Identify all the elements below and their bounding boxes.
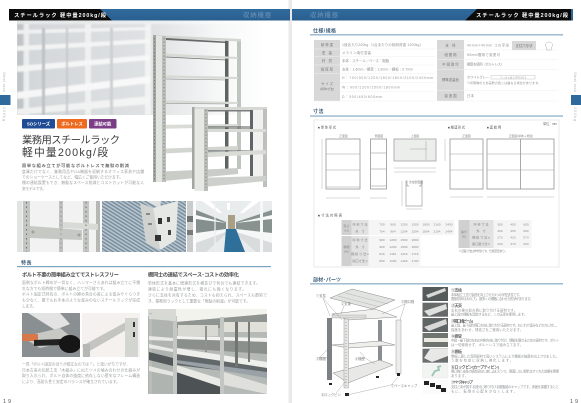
part 5: う数を有効に収納し美化します。 [451, 358, 513, 362]
depth table: 開口面寸法 b [472, 241, 490, 246]
part 7: ⑦ベースキャップ [451, 378, 473, 384]
drawing labels: 正面図 [462, 134, 471, 138]
intro text: 簡単な組み立てが可能なボルトレスで無駄の削減 [22, 162, 130, 169]
width table: 1500 [401, 245, 408, 249]
exploded parts diagram: ①支柱 [316, 293, 327, 298]
part 1: 関係形状のほかにも、数多くの規格に合わせた形状があります。 [451, 296, 533, 301]
width table: 呼 称 寸 法 [353, 237, 367, 242]
dimensions panel: ■増連形式 [448, 124, 466, 130]
height table: 2400 [446, 222, 453, 226]
part 6: 開口桟と支柱の組合部分に差し込むピンで、脱落しない設計はすぐれた効果を発揮 [451, 369, 560, 374]
depth table: 棚 板 寸 法 a [472, 234, 490, 240]
feature: boltless text: 面倒なボルト締めが一切なく、ハンマーさえあれば組み立てに不慣 [22, 280, 140, 285]
part 4 [422, 332, 559, 347]
spec table left: H：700/900/1200/1500/1800/2100/2400mm [342, 76, 433, 80]
height table: 1804 [423, 230, 430, 234]
photo: post on carpet [102, 201, 186, 252]
right page header bar [292, 9, 573, 20]
width table: 外 寸 [355, 244, 365, 249]
series badges [22, 119, 116, 128]
feature: linking text: 単体形式を基本に増連形式を横並びで何台でも連結できます。 [148, 280, 260, 286]
parts heading: 部材･パーツ [313, 276, 341, 284]
drawing: top view [394, 139, 445, 172]
spec table right: 50mm間隔で変更可 [467, 52, 501, 57]
height table: 外 寸 [355, 228, 365, 234]
feature: linking text [148, 270, 267, 304]
intro text: 気モデルです。 [22, 186, 46, 191]
left side tab: 200kg [2, 107, 7, 121]
part 1 [422, 286, 533, 301]
spec table right: 日本 [467, 93, 475, 98]
width table: 1800 [412, 245, 419, 249]
height table: 1504 [412, 230, 419, 234]
feature: linking text: 連結により耐震性が増し、揺れにも強くなります。 [148, 286, 246, 292]
spec table left: 本体：スチール／ベース：樹脂 [342, 58, 390, 63]
spec table left: W：900/1200/1500/1800mm [342, 86, 400, 90]
spec table right: 標準塗装色 [442, 77, 460, 82]
spec table left: メラミン焼付塗装 [342, 50, 372, 55]
left side tab [0, 72, 10, 121]
photo: rack beam closeup [17, 201, 100, 252]
height table: 1200 [401, 222, 408, 226]
boltless note text: により、高耐久性と安定のバランスが確立されています。 [22, 379, 120, 384]
exploded parts diagram: ④棚受 [355, 356, 366, 361]
depth table: ※記載寸法は参考値です。仕様変更あり。 [458, 249, 508, 253]
part 7: 支柱と床が接する部分に取り付ける樹脂製のキャップです。床面を保護するとと [451, 384, 559, 389]
drawing: front view [322, 139, 360, 198]
depth table: 220 [497, 242, 503, 246]
part 4: 中段・最下段の左右の内側方向に取り付け、棚板を載せるための部材です。ボルト [451, 338, 559, 343]
spec table right [437, 40, 558, 101]
depth table: 呼 称 寸 法 [474, 222, 488, 226]
spec table right: 支 柱 [445, 42, 456, 48]
spec table right: 支柱穴形状 [516, 43, 533, 48]
height table: 704 [379, 230, 385, 234]
height table: 呼 称 寸 法 [353, 222, 367, 226]
depth table: 423 [510, 236, 516, 240]
dimensions panel: ■単体形式 [318, 124, 337, 130]
dimensions panel [314, 120, 559, 267]
width table: 800 [379, 259, 385, 263]
exploded parts diagram: ③開口桟 [401, 299, 415, 304]
height table: (H) [344, 228, 349, 232]
part 3 [422, 317, 559, 332]
exploded parts diagram: ⑥ロックピン [321, 392, 341, 397]
spec table right: 段 間 隔 [444, 52, 457, 57]
table caption: ■寸法対照表 [318, 212, 343, 218]
part 4: は一切使用せず、ボルトレスで組み立てます。 [451, 342, 523, 347]
spec table right: 中 段 取 付 [442, 62, 459, 66]
height table: 1800 [423, 222, 430, 226]
main heading: 軽中量200kg/段 [22, 145, 108, 159]
part 7: もに、転倒の心配を少なくします。 [451, 388, 517, 393]
width table: 900 [379, 238, 385, 242]
width table: 1116 [390, 252, 396, 256]
dimensions heading: 寸法 [313, 108, 324, 115]
spec table left: 材 質 [322, 58, 333, 63]
intro text: 倉庫だけでなく、業務用品やOA機器を収納するオフィス家具や店舗 [22, 169, 144, 174]
drawing: post section [402, 181, 422, 209]
boltless note text [22, 362, 140, 384]
hero warehouse photo [17, 21, 222, 115]
spec table left: サ イ ズ [321, 81, 334, 86]
left side tab: Steel rack [2, 72, 7, 92]
width table [342, 236, 420, 266]
drawing labels: 上面図 [411, 134, 419, 138]
spec table left: 板 厚 厚 [321, 66, 334, 72]
drawing labels: 正面図 [339, 134, 348, 138]
part 2: 左右の棒の前方奥に取り付ける部材です。 [451, 307, 517, 312]
height table: 1500 [412, 222, 419, 226]
intro text [22, 162, 144, 191]
width table: 1700 [412, 259, 419, 263]
spec table left [314, 40, 435, 101]
spec table left: D：300/450/600mm [342, 95, 382, 99]
spec table right: ホワイトグレー [467, 74, 490, 80]
height table: 2100 [434, 222, 441, 226]
width table: 1800 [412, 238, 419, 242]
spec table left: 塗 装 [322, 50, 333, 55]
right side tab [571, 72, 581, 121]
drawing labels: 支柱断面図 [409, 180, 423, 184]
depth table: 573 [523, 236, 529, 240]
part 3: 強度をあわせ、桟高さをご使用いただけます。 [451, 327, 523, 332]
gutter between pages [288, 0, 292, 403]
part 1: 本体組立工法で製品を向上させた3つの字型支柱です。 [451, 292, 522, 297]
exploded parts diagram [316, 289, 418, 397]
width table: 横幅 [343, 244, 350, 249]
spec heading: 仕様/規格 [313, 28, 336, 34]
spec table left: 1段あたり200kg（1台あたりの総耐荷重 1200kg） [342, 42, 423, 47]
photo: warehouse aisle [187, 201, 272, 252]
drawing: linked front and rear [487, 139, 554, 197]
depth table: 450 [510, 229, 516, 233]
left page header bar [9, 9, 290, 20]
height table: 高さ [343, 223, 350, 228]
right side tab: Steel rack [573, 72, 578, 92]
part 5 [422, 348, 559, 363]
spec table right: 製 造 国 [444, 93, 457, 98]
feature: linking text: 棚同士の連結でスペース･コストの効率化 [148, 270, 240, 278]
main heading: 業務用スチールラック [22, 134, 120, 146]
part 3: ③開口桟(ビーム) [451, 317, 474, 323]
dimensions panel: ■連結例 [487, 124, 501, 130]
part 5: 単板に適した専用部材で高いシステムにより棚板の強度を向上させました。 [451, 353, 559, 358]
boltless note text: 一見「ボルト固定のほうが頑丈なのでは？」と思いがちですが、 [22, 362, 130, 366]
part 4: ④棚受 [451, 332, 462, 338]
spec table right: マンセル値 2.5PB 8/0.5 [500, 75, 527, 79]
drawing labels [339, 134, 533, 184]
height table: 700 [379, 222, 385, 226]
feature: linking text: き、業務用ラックとして重要な「無駄の削減」が可能です。 [148, 298, 250, 304]
part 2 [422, 302, 527, 317]
width table: 900 [379, 245, 385, 249]
header title: スチールラック 軽中量200kg/段 [14, 11, 107, 19]
height table [342, 220, 454, 235]
height table: 1204 [401, 230, 408, 234]
width table: 1500 [401, 238, 408, 242]
part 6: ⑥ロックピン(カープティピン) [451, 363, 500, 369]
drawing labels: 正面図(単体＋増連) [509, 134, 533, 138]
drawing: linked front [450, 139, 483, 197]
features heading: 特長 [21, 260, 32, 266]
drawing labels: 側面図 [375, 134, 383, 138]
series badges: 連結可能 [94, 120, 112, 128]
width table: 816 [379, 252, 385, 256]
header category: 収納機器 [310, 10, 339, 19]
width table: 1200 [390, 245, 397, 249]
spec table left: 支柱：1.6mm／棚受：1.6mm／棚板：0.7mm [342, 66, 413, 72]
depth table: 370 [510, 242, 516, 246]
series badges: SOシリーズ [27, 120, 51, 128]
feature: boltless text: も少なく、誰でもお手本のような歪みのないスチールラックが完成 [22, 297, 140, 302]
spec table left: (呼称寸法) [320, 86, 334, 91]
height table: 904 [390, 230, 396, 234]
part 5: ⑤棚板 [451, 348, 462, 354]
feature: linking text: さらに支柱を共有するため、コストも抑えられ、スペースも節約で [148, 292, 267, 298]
exploded parts diagram: ⑦ベースキャップ [391, 383, 418, 388]
depth table [458, 220, 532, 253]
part 2: 最上段の棚板を固定するなど、この天束を使用します。 [451, 312, 527, 316]
part 6: あります。 [451, 373, 468, 378]
depth table: 外 寸 [476, 228, 486, 233]
header title: スチールラック 軽中量200kg/段 [476, 11, 569, 19]
part 6 [422, 363, 560, 378]
series badges: ボルトレス [61, 120, 83, 128]
width table: 1400 [401, 259, 408, 263]
depth table: 600 [523, 229, 529, 233]
depth table: 奥行 [461, 229, 467, 234]
spec table right: ※印刷物のため実際の色とは異なる場合があります。 [467, 80, 541, 85]
part 1: ①支柱 [451, 286, 462, 292]
width table: 1716 [412, 252, 419, 256]
exploded parts diagram: ②天束 [341, 301, 352, 306]
photo: beam joint [82, 313, 140, 357]
spec table right: 棚受を使用（ボルトレス） [467, 62, 504, 66]
depth table: 300 [497, 222, 503, 226]
small steel rack [192, 107, 267, 191]
width table: 開口寸法 b [353, 258, 368, 263]
part 3: 最上段、最下段の開口方向に取り付ける部材です。ねじれや歪みなどの力に対し、 [451, 323, 559, 328]
header category: 収納機器 [243, 10, 272, 19]
feature: boltless text: ボルト不要の簡単組み立てでストレスフリー [22, 270, 119, 278]
large steel rack [153, 35, 241, 182]
spec table left: 耐 荷 重 [321, 42, 334, 47]
boltless note text: 日本古来の伝統工法「木組み」に似たツメの噛み合わせの仕組みが [22, 368, 140, 372]
photo: linked racks [148, 309, 267, 394]
height table: 2104 [434, 230, 441, 234]
width table: 1200 [390, 238, 397, 242]
main heading [22, 134, 120, 159]
spec table right: 40mm×40mm コの字形 [467, 42, 510, 48]
parts list [422, 286, 560, 394]
feature: boltless text: ボルト固定式特有の、ボルトの締め具合の差による歪みやぐらつき [22, 292, 140, 297]
exploded parts diagram: ⑤棚板 [316, 356, 327, 361]
width table: 1416 [401, 252, 408, 256]
dimensions panel: 単位：mm [543, 121, 557, 126]
feature: boltless text: します。 [22, 304, 36, 308]
intro text: でのショーケースとしてなど、幅広くご使用いただけます。 [22, 174, 123, 180]
part 7 [422, 378, 559, 394]
height table: 900 [390, 222, 396, 226]
feature: boltless text [22, 270, 140, 308]
depth table: 300 [497, 229, 503, 233]
width table: 1100 [390, 259, 397, 263]
intro text: 棚の連結設置もでき、無駄なスペース削減とコストカットが可能な人 [22, 180, 144, 185]
height table: 2404 [446, 230, 453, 234]
boltless note text: 取り入れられ、ボルト自体の強度に依存しない堅牢なフレーム構造 [22, 373, 140, 378]
feature: boltless text: れな方でも短時間で簡単に組み立てが可能です。 [22, 286, 107, 291]
drawing: side view [370, 139, 387, 198]
depth table: 450 [510, 222, 516, 226]
depth table: 273 [497, 236, 503, 240]
depth table: (D) [462, 234, 466, 238]
depth table: 520 [523, 242, 529, 246]
photo: hammer on carpet [22, 313, 81, 357]
width table: (W) [344, 250, 349, 254]
width table: 棚 板 寸 法 a [351, 251, 369, 256]
right side tab: 200kg [573, 107, 578, 121]
depth table: 600 [523, 222, 529, 226]
part 2: ②天束 [451, 302, 462, 308]
